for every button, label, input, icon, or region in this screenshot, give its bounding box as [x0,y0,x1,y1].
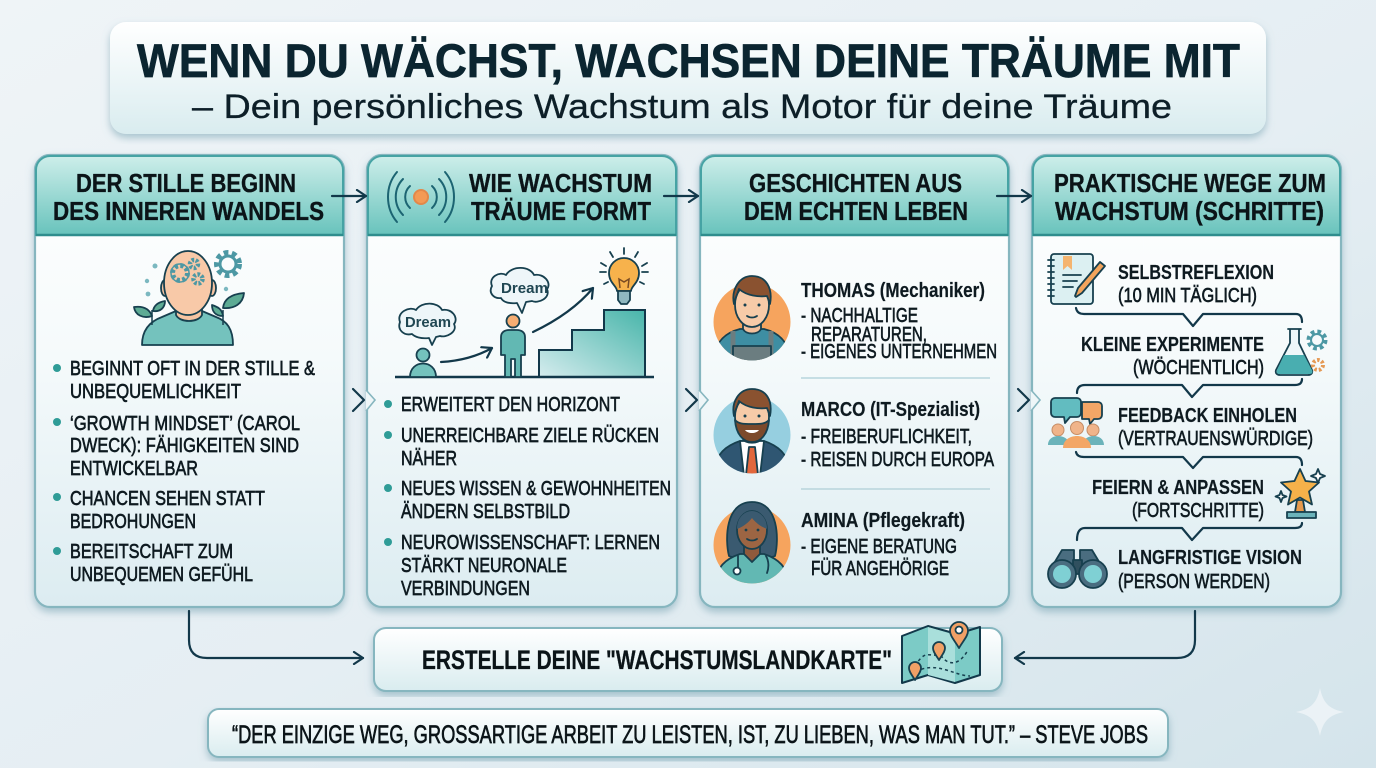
arrow: panel 4 to map [1015,611,1195,658]
bullet list: CHANCEN SEHEN STATT [70,487,265,510]
icon: map [902,622,980,683]
thomas text: REPARATUREN, [811,323,927,346]
main title: WENN DU WÄCHST, WACHSEN DEINE TRÄUME MIT [137,34,1240,87]
chevron: panel 2 to 3 [686,389,708,411]
title box [110,22,1266,134]
step 2 text: KLEINE EXPERIMENTE [1081,333,1264,356]
heading: GESCHICHTEN AUS [749,168,962,198]
icon: flask and gears [1276,329,1325,375]
bullet list: DWECK): FÄHIGKEITEN SIND [70,434,299,457]
bullet list: NEUES WISSEN & GEWOHNHEITEN [401,477,671,500]
icon: feedback group [1048,398,1104,448]
bullet list: ENTWICKELBAR [70,457,198,480]
heading [744,168,968,226]
chevron: panel 1 to 2 [353,389,375,411]
bullet list: UNBEQUEMEN GEFÜHL [70,563,253,586]
bullet list: BEDROHUNGEN [70,510,196,533]
bullet list: BEREITSCHAFT ZUM [70,540,233,563]
icon: notebook and pencil [1048,254,1105,304]
step 1 text: (10 MIN TÄGLICH) [1118,284,1257,307]
heading [1054,168,1326,226]
bullet list: ÄNDERN SELBSTBILD [401,500,570,523]
marco text: - REISEN DURCH EUROPA [801,448,994,471]
icon: sparkle [1296,688,1344,736]
quote box [208,709,1168,757]
connector 1 [1076,308,1302,326]
step 4 text [1092,476,1264,522]
icon: head with gears and plants [134,251,244,345]
bullet list: ERWEITERT DEN HORIZONT [401,393,620,416]
step 4 text: FEIERN & ANPASSEN [1092,476,1264,499]
heading: WACHSTUM (SCHRITTE) [1055,196,1324,226]
bullet list: ‘GROWTH MINDSET’ (CAROL [70,412,300,435]
step 1 text [1118,261,1274,307]
bullet list: STÄRKT NEURONALE [401,554,567,577]
icon: signal [388,172,454,222]
amina text: - EIGENE BERATUNG [801,535,957,558]
thomas text: - NACHHALTIGE [801,304,918,327]
amina text: FÜR ANGEHÖRIGE [811,557,949,580]
step 2 text [1081,333,1264,379]
connector 3 [1076,452,1302,468]
marco text [801,398,994,471]
chevron: panel 3 to 4 [1018,389,1040,411]
panel 3: geschichten aus dem echten leben [700,155,1009,607]
step 3 text [1118,404,1313,450]
bullet list: NEUROWISSENSCHAFT: LERNEN [401,531,660,554]
marco text: - FREIBERUFLICHKEIT, [801,425,972,448]
arrow: panel 1 to 2 [332,195,366,197]
icon: trophy star [1276,469,1325,518]
illustration: dream growth: Dream [405,315,451,331]
heading: DES INNEREN WANDELS [53,196,324,226]
bullet list: UNBEQUEMLICHKEIT [70,380,241,403]
amina text [801,509,965,580]
icon: binoculars [1048,550,1107,588]
bullet list [384,393,671,600]
arrow: panel 1 to map [189,611,363,658]
callout: wachstumslandkarte: ERSTELLE DEINE "WACHSTUMSLANDKARTE" [422,645,892,675]
connector 2 [1077,379,1302,397]
arrow: panel 3 to 4 [997,195,1031,197]
panel 2: wie wachstum träume formt [367,155,677,607]
step 5 text: (PERSON WERDEN) [1118,570,1270,593]
avatar: marco [714,389,790,476]
connector 4 [1077,523,1302,540]
bullet list: NÄHER [401,447,457,470]
illustration: dream growth [395,248,654,377]
panel 1: der stille beginn [35,155,344,607]
heading: TRÄUME FORMT [471,196,651,226]
callout: wachstumslandkarte [374,622,1002,691]
bullet list [53,357,315,586]
thomas text [801,279,997,363]
illustration: dream growth: Dream [501,281,548,297]
arrow: panel 2 to 3 [664,195,698,197]
heading [469,168,652,226]
thomas text: - EIGENES UNTERNEHMEN [801,340,997,363]
step 3 text: (VERTRAUENSWÜRDIGE) [1118,427,1313,450]
step 2 text: (WÖCHENTLICH) [1133,356,1264,379]
avatar: amina [714,502,790,590]
step 3 text: FEEDBACK EINHOLEN [1118,404,1297,427]
heading: DEM ECHTEN LEBEN [744,196,968,226]
heading [53,168,324,226]
bullet list: BEGINNT OFT IN DER STILLE & [70,357,315,380]
step 1 text: SELBSTREFLEXION [1118,261,1274,284]
subtitle: – Dein persönliches Wachstum als Motor für deine Träume [192,88,1172,126]
step 5 text [1118,546,1302,593]
heading: PRAKTISCHE WEGE ZUM [1054,168,1326,198]
heading: WIE WACHSTUM [469,168,652,198]
bullet list: VERBINDUNGEN [401,577,530,600]
thomas text: THOMAS (Mechaniker) [801,279,985,302]
heading: DER STILLE BEGINN [76,168,296,198]
bullet list: UNERREICHBARE ZIELE RÜCKEN [401,424,659,447]
amina text: AMINA (Pflegekraft) [801,509,965,532]
panel 4: praktische wege zum wachstum [1032,155,1341,607]
step 4 text: (FORTSCHRITTE) [1132,499,1264,522]
marco text: MARCO (IT-Spezialist) [801,398,980,421]
step 5 text: LANGFRISTIGE VISION [1118,546,1302,569]
avatar: thomas [714,276,790,366]
